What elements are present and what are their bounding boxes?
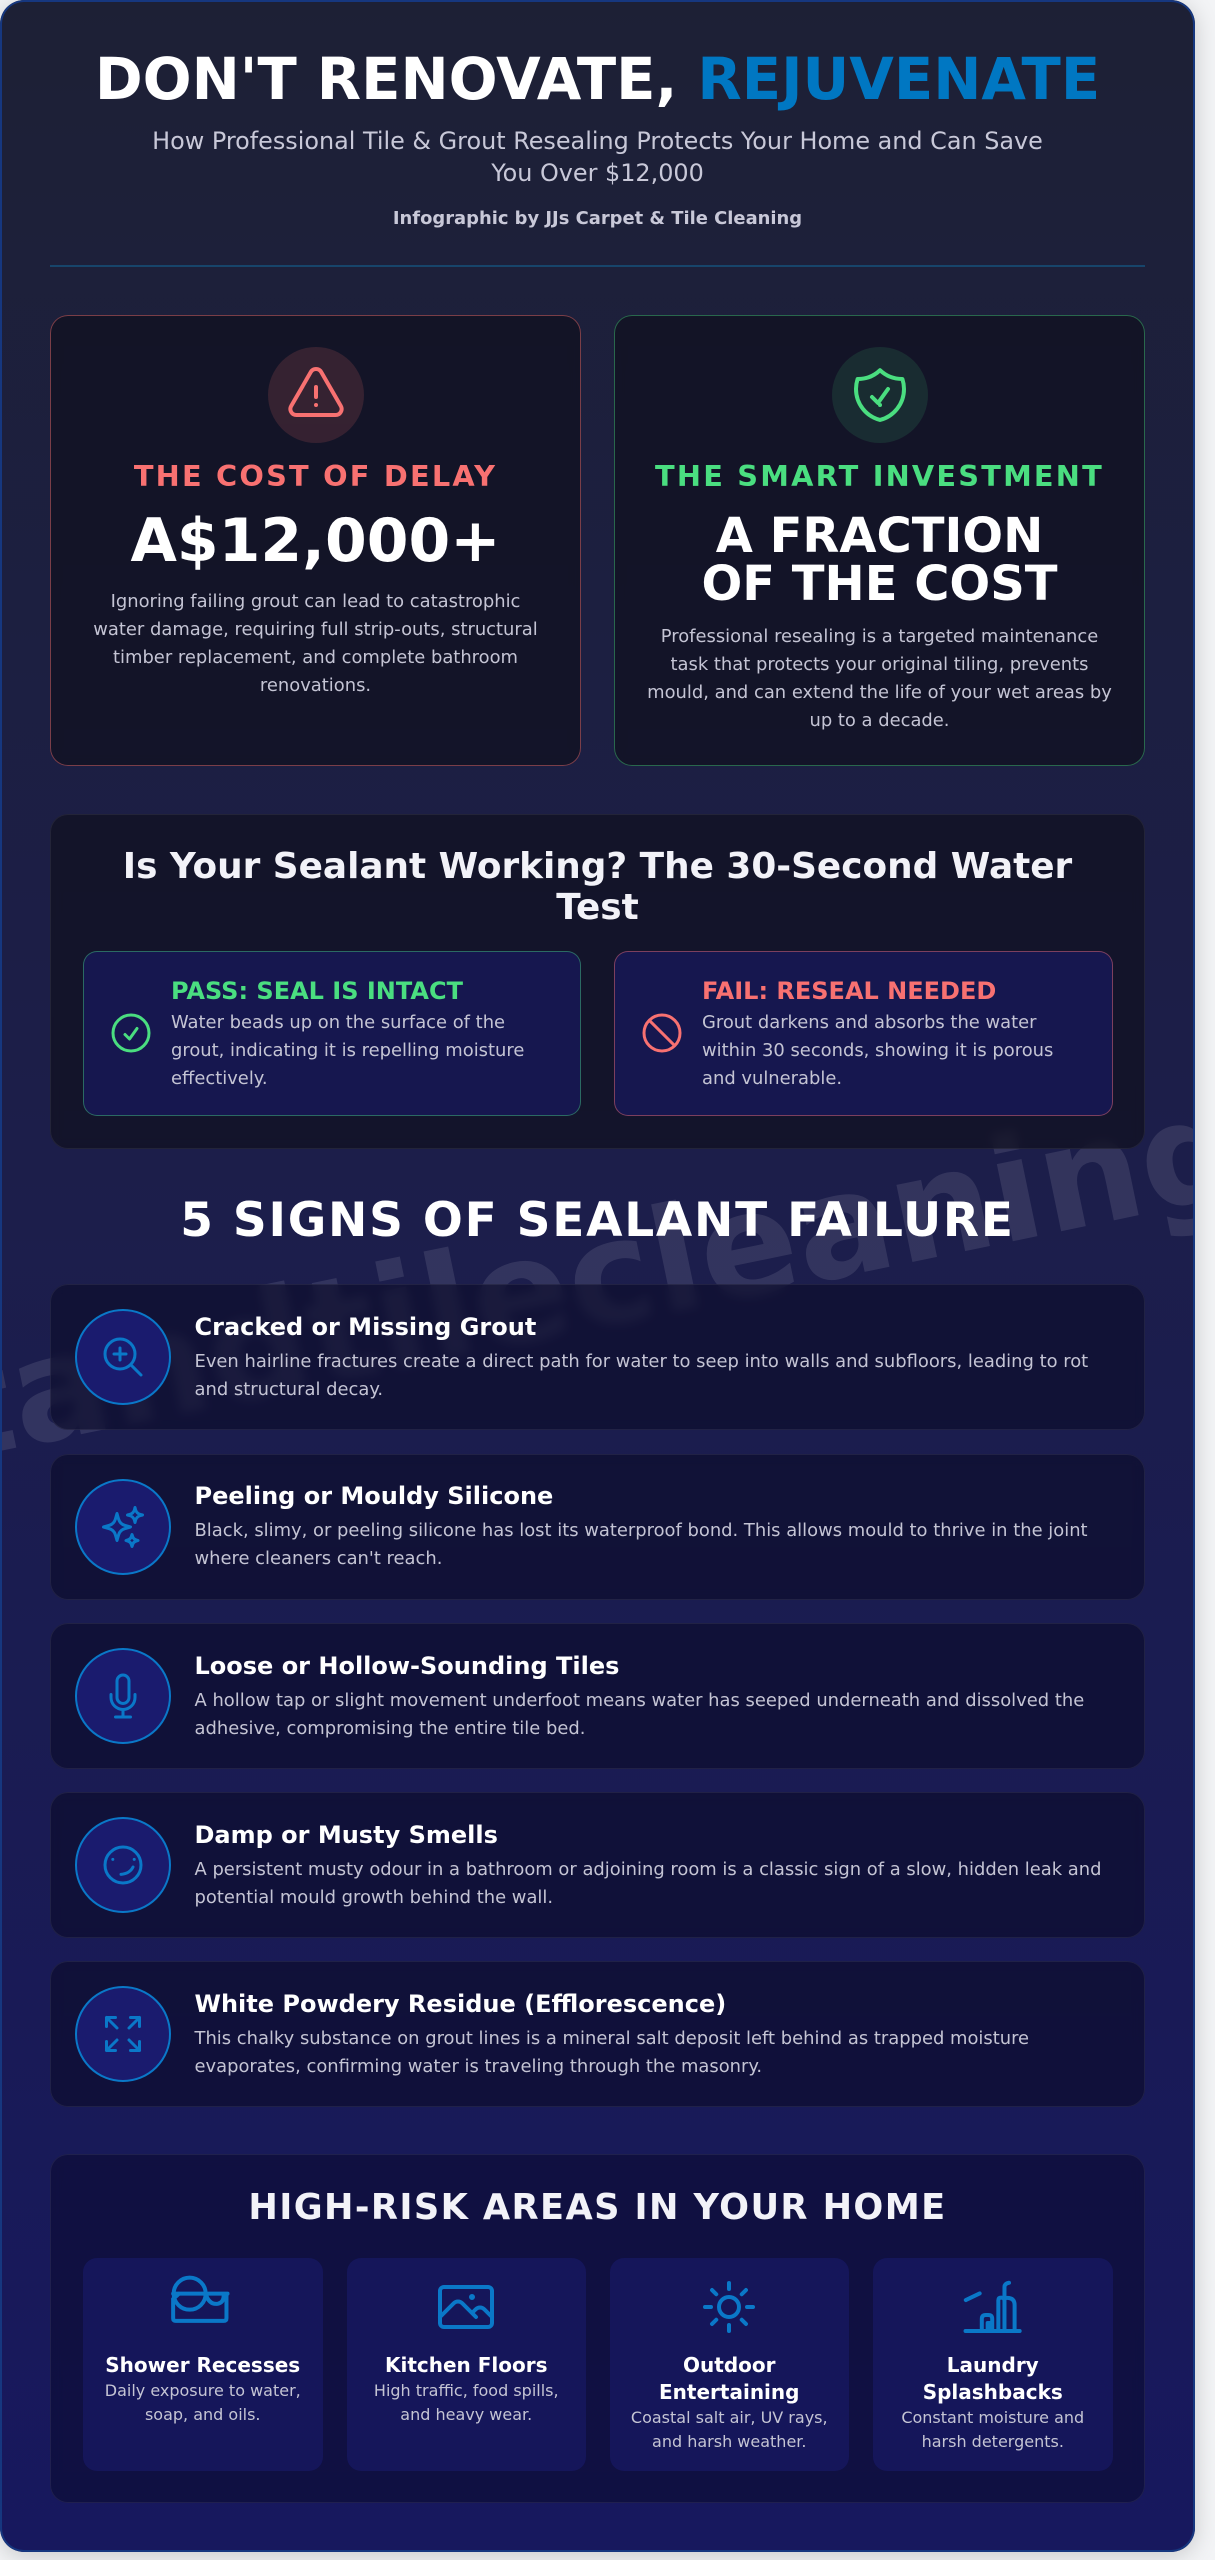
area text: Coastal salt air, UV rays, <box>631 2408 828 2426</box>
sign title: Cracked or Missing Grout <box>194 1313 536 1341</box>
sign 1 <box>50 1284 1145 1430</box>
card: pass <box>83 951 581 1116</box>
sign 3 <box>50 1623 1145 1769</box>
text: investment description: up to a decade. <box>809 710 950 731</box>
area title: Shower Recesses <box>105 2352 300 2376</box>
area title: Laundry <box>947 2352 1039 2376</box>
panel: high-risk areas <box>50 2154 1145 2503</box>
icon: microphone <box>75 1648 171 1744</box>
text: investment description <box>647 626 1112 731</box>
sign title: Damp or Musty Smells <box>194 1821 498 1849</box>
text: pass: Water beads up on the surface of the <box>171 1012 505 1033</box>
label: pass: PASS: SEAL IS INTACT <box>171 977 463 1005</box>
panel: water test <box>50 814 1145 1149</box>
card: outdoor entertaining <box>610 2258 849 2471</box>
text: pass: grout, indicating it is repelling moisture <box>171 1040 524 1061</box>
area title: Entertaining <box>659 2380 799 2404</box>
icon: shield check <box>832 347 928 443</box>
area text: High traffic, food spills, <box>374 2380 559 2400</box>
text: investment description: mould, and can extend the life of your wet areas by <box>647 682 1112 703</box>
area title <box>923 2352 1063 2404</box>
area title <box>659 2352 799 2404</box>
icon: warning triangle <box>268 347 364 443</box>
text: pass <box>171 1012 524 1089</box>
text: cost description: Ignoring failing grout can lead to catastrophic <box>111 591 520 612</box>
sign text: Even hairline fractures create a direct path for water to seep into walls and subfloors, leading to rot <box>194 1351 1088 1372</box>
icon: check circle <box>112 1014 150 1052</box>
heading: the smart investment: THE SMART INVESTMENT <box>655 459 1104 493</box>
area title: Splashbacks <box>923 2380 1063 2404</box>
heading: water test: Is Your Sealant Working? The 30-Second Water <box>123 846 1072 887</box>
text: cost description <box>93 591 538 696</box>
area title: Outdoor <box>683 2352 775 2376</box>
sign text <box>194 1690 1084 1739</box>
byline: Infographic by JJs Carpet & Tile Cleaning <box>393 208 802 229</box>
text: cost description: water damage, requiring full strip-outs, structural <box>93 619 538 640</box>
sign text <box>194 2028 1029 2077</box>
sign text: A hollow tap or slight movement underfoot means water has seeped underneath and dissolved the <box>194 1690 1084 1711</box>
heading: water test: Test <box>556 887 639 928</box>
text: fail: Grout darkens and absorbs the water <box>702 1012 1037 1033</box>
card: laundry splashbacks <box>873 2258 1112 2471</box>
figure: a fraction of the cost: A FRACTION <box>716 508 1043 564</box>
card: kitchen floors <box>346 2258 586 2471</box>
icon: arrows out <box>75 1986 171 2082</box>
icon: shower <box>171 2276 230 2323</box>
label: fail: FAIL: RESEAL NEEDED <box>702 977 996 1005</box>
sign text <box>194 1859 1102 1908</box>
heading: high-risk areas: HIGH-RISK AREAS IN YOUR HOME <box>248 2187 947 2228</box>
heading: water test <box>123 846 1072 928</box>
sign text: Black, slimy, or peeling silicone has lost its waterproof bond. This allows mould to thrive in the joint <box>194 1520 1088 1541</box>
subtitle: You Over $12,000 <box>491 159 704 187</box>
sign title: White Powdery Residue (Efflorescence) <box>194 1990 726 2018</box>
sign text: A persistent musty odour in a bathroom or adjoining room is a classic sign of a slow, hidden leak and <box>194 1859 1102 1880</box>
area text <box>901 2408 1084 2450</box>
text: cost description: timber replacement, and complete bathroom <box>113 647 518 668</box>
sign title: Loose or Hollow-Sounding Tiles <box>194 1652 619 1680</box>
panel: the cost of delay <box>50 315 581 766</box>
card: shower recesses <box>83 2258 322 2471</box>
sign text: evaporates, confirming water is traveling through the masonry. <box>194 2056 762 2077</box>
text: fail: and vulnerable. <box>702 1068 842 1089</box>
area text: and harsh weather. <box>652 2432 806 2450</box>
icon: laundry <box>964 2280 1022 2333</box>
figure: cost: A$12,000+ <box>130 506 500 576</box>
area text <box>374 2380 559 2424</box>
panel: the smart investment <box>614 315 1145 766</box>
icon: picture <box>438 2285 494 2329</box>
sign text: potential mould growth behind the wall. <box>194 1887 553 1908</box>
sign text <box>194 1351 1088 1400</box>
icon: no symbol <box>642 1014 682 1052</box>
area text <box>105 2380 301 2424</box>
area text <box>631 2408 828 2450</box>
card: fail <box>614 951 1113 1116</box>
sign 5 <box>50 1961 1145 2107</box>
title: DON'T RENOVATE, REJUVENATE <box>95 46 1100 113</box>
text: investment description: Professional resealing is a targeted maintenance <box>661 626 1098 647</box>
heading: the cost of delay: THE COST OF DELAY <box>134 459 497 493</box>
area text: soap, and oils. <box>145 2404 261 2424</box>
sign 4 <box>50 1792 1145 1938</box>
area text: harsh detergents. <box>922 2432 1064 2450</box>
area text: Daily exposure to water, <box>105 2380 301 2400</box>
figure: a fraction of the cost <box>701 508 1058 612</box>
sign text: adhesive, compromising the entire tile bed. <box>194 1718 585 1739</box>
heading: 5 signs: 5 SIGNS OF SEALANT FAILURE <box>180 1193 1015 1248</box>
area title: Kitchen Floors <box>385 2352 548 2376</box>
icon: sun <box>703 2281 755 2333</box>
text: fail: within 30 seconds, showing it is porous <box>702 1040 1053 1061</box>
text: fail <box>702 1012 1053 1089</box>
text: cost description: renovations. <box>260 675 371 696</box>
subtitle: How Professional Tile & Grout Resealing Protects Your Home and Can Save <box>152 127 1043 155</box>
icon: sparkles <box>75 1478 171 1574</box>
sign title: Peeling or Mouldy Silicone <box>194 1482 553 1510</box>
sign text <box>194 1520 1088 1569</box>
area text: Constant moisture and <box>901 2408 1084 2426</box>
figure: a fraction of the cost: OF THE COST <box>701 556 1058 612</box>
sign text: This chalky substance on grout lines is a mineral salt deposit left behind as trapped moisture <box>194 2028 1029 2049</box>
text: investment description: task that protects your original tiling, prevents <box>671 654 1088 675</box>
area text: and heavy wear. <box>400 2404 532 2424</box>
sign text: and structural decay. <box>194 1379 383 1400</box>
text: pass: effectively. <box>171 1068 268 1089</box>
sign 2 <box>50 1454 1145 1600</box>
icon: magnifier <box>75 1309 171 1405</box>
subtitle <box>152 127 1043 187</box>
icon: face <box>75 1817 171 1913</box>
sign text: where cleaners can't reach. <box>194 1548 442 1569</box>
